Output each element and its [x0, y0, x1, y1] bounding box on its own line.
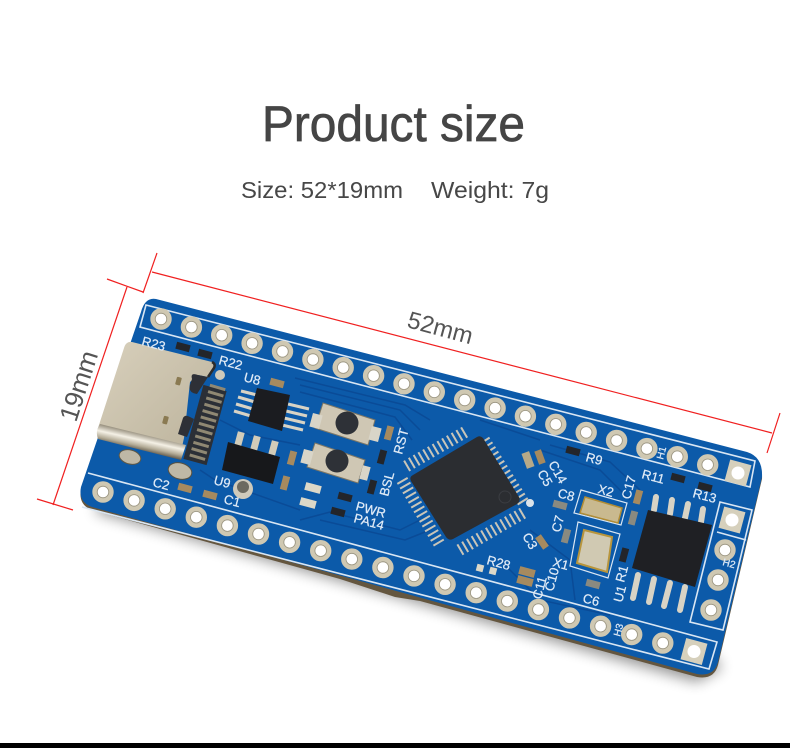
copper traces [200, 378, 640, 615]
regulator U9 [222, 431, 280, 499]
dimension: 52mm length [143, 253, 780, 453]
hole inner shading [97, 313, 731, 649]
silkscreen labels: C5 [534, 467, 556, 489]
crystal X2 [574, 490, 627, 525]
silkscreen labels: C14 [545, 458, 570, 486]
crystal X1 [570, 522, 620, 578]
silkscreen labels: C8 [556, 485, 576, 504]
top header holes [153, 311, 716, 473]
silkscreen labels: X2 [596, 481, 615, 500]
silkscreen labels: BSL [376, 470, 397, 498]
board shadow [95, 480, 722, 682]
silkscreen outlines [82, 305, 755, 669]
dimension: 52mm length: 52mm [404, 307, 476, 350]
silkscreen labels: C3 [519, 530, 541, 552]
silkscreen labels [140, 333, 737, 638]
silkscreen labels: RST [390, 427, 412, 456]
title: Product size [262, 96, 525, 152]
USB Type-C connector [97, 342, 225, 482]
silkscreen labels: C10 [541, 566, 562, 593]
silkscreen labels: U9 [212, 472, 232, 491]
dimension: 19mm width [37, 279, 143, 510]
bottom black bar [0, 743, 790, 748]
silkscreen labels: U1 [610, 584, 629, 604]
silkscreen labels: R13 [691, 485, 718, 506]
silkscreen labels: X1 [551, 554, 570, 573]
silkscreen labels: R28 [485, 552, 512, 573]
silkscreen labels: U8 [242, 369, 262, 388]
silkscreen labels: PA14 [352, 510, 386, 533]
subtitle: size and weight: Size: 52*19mm [241, 177, 403, 203]
silkscreen labels: C1 [222, 491, 242, 510]
circuit board photo [80, 299, 762, 682]
bottom header holes [95, 484, 671, 651]
subtitle: size and weight [241, 177, 549, 203]
small surface mount parts [175, 342, 713, 589]
board edge thickness [80, 301, 762, 678]
silkscreen labels: R9 [584, 449, 604, 468]
silkscreen labels: H2 [721, 557, 737, 571]
chip U8 [234, 388, 309, 431]
silkscreen labels: PWR [354, 498, 387, 521]
silkscreen labels: H1 [655, 445, 669, 461]
silkscreen labels: R23 [140, 333, 167, 354]
subtitle: size and weight: Weight: 7g [431, 177, 549, 203]
silkscreen labels: C17 [618, 474, 639, 501]
MCU chip with pins [402, 432, 534, 551]
silkscreen labels: R1 [612, 564, 631, 584]
silkscreen labels: C7 [548, 514, 567, 534]
silkscreen labels: H3 [612, 622, 626, 638]
tactile button 2 [300, 443, 371, 483]
board blue surface [80, 299, 762, 674]
silkscreen labels: C11 [529, 575, 550, 601]
silkscreen labels: C2 [151, 474, 171, 493]
tactile button 1 [309, 403, 382, 445]
chip U1 [632, 497, 712, 610]
silkscreen labels: R11 [640, 466, 666, 487]
right header holes [681, 460, 751, 665]
silkscreen labels: R22 [217, 352, 244, 373]
dimension: 19mm width: 19mm [53, 347, 104, 425]
silkscreen labels: C6 [581, 590, 601, 609]
